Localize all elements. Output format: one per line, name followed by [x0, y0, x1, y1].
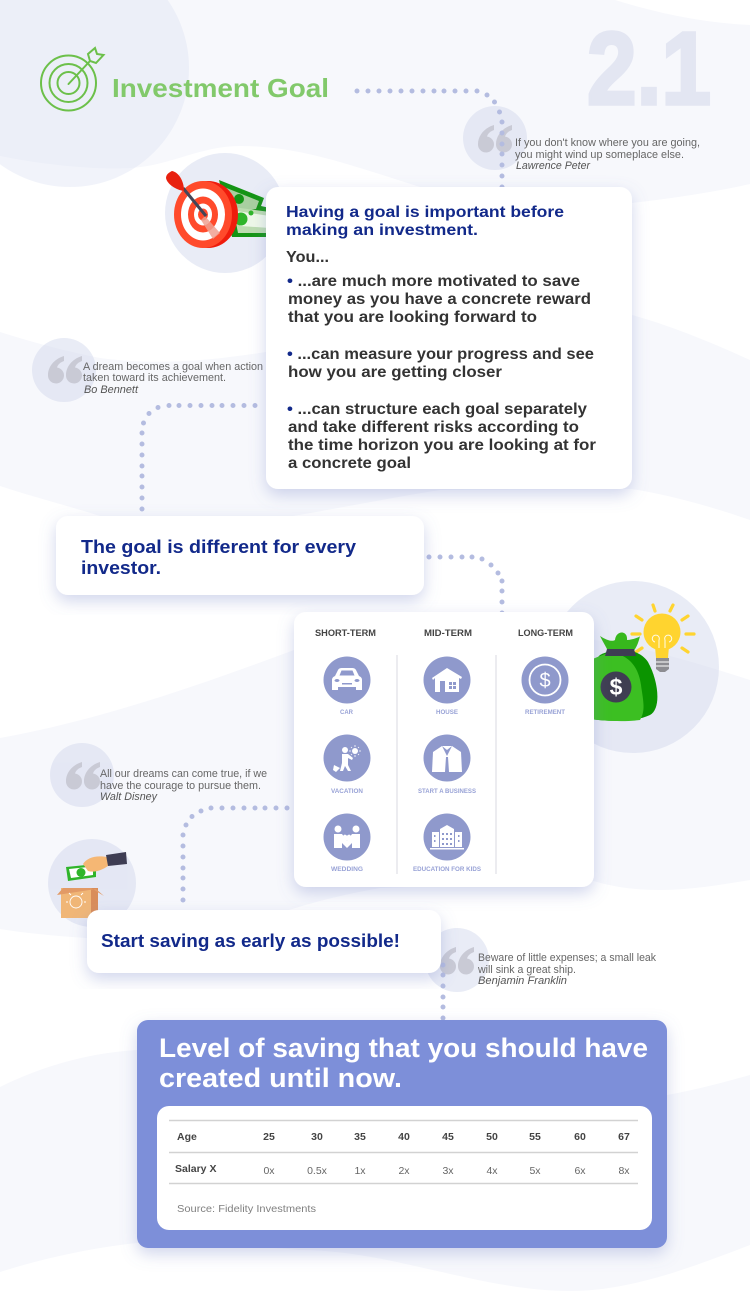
- icon: money bag and light bulb: [590, 605, 694, 721]
- quote: Walt Disney: [100, 768, 267, 803]
- table: saving by age: Salary X: [175, 1163, 216, 1175]
- icon: wedding couple: [324, 814, 370, 860]
- table: saving by age: 0x: [263, 1165, 275, 1177]
- table: saving by age: 45: [442, 1131, 454, 1143]
- panel: why a goal matters: • ...can structure each goal separately: [287, 401, 587, 418]
- quote: Lawrence Peter: [515, 137, 700, 172]
- table: saving by age: 30: [311, 1131, 323, 1143]
- quote: Bo Bennett: A dream becomes a goal when action: [83, 361, 263, 373]
- icon: vacation traveller: [324, 734, 370, 782]
- heading: level of saving: created until now.: [159, 1063, 402, 1093]
- panel: level of saving: [137, 1020, 667, 1248]
- icon: school building: [424, 814, 470, 860]
- table: saving by age: 2x: [398, 1165, 410, 1177]
- panel: goal differs per investor: The goal is different for every: [81, 536, 357, 557]
- quote: Bo Bennett: taken toward its achievement.: [83, 372, 226, 384]
- label: retirement: RETIREMENT: [525, 710, 565, 716]
- icon: dartboard and money: [166, 171, 270, 248]
- icon: green target with arrow: [41, 48, 104, 110]
- icon: hand putting money in box: [57, 852, 127, 918]
- table: saving by age: 60: [574, 1131, 586, 1143]
- quote: Bo Bennett: [83, 361, 263, 396]
- panel: why a goal matters: that you are looking forward to: [288, 309, 537, 326]
- quote: Benjamin Franklin: will sink a great ship.: [477, 964, 576, 976]
- panel: why a goal matters: and take different risks according to: [288, 419, 579, 436]
- table: saving by age: 6x: [574, 1165, 586, 1177]
- label: start a business: START A BUSINESS: [418, 789, 476, 795]
- table: saving by age: 35: [354, 1131, 366, 1143]
- panel: why a goal matters: a concrete goal: [288, 455, 411, 472]
- quote: Bo Bennett: Bo Bennett: [84, 384, 139, 396]
- section number: 2.1: [587, 11, 711, 126]
- icon: money bag and light bulb: $: [610, 674, 623, 700]
- panel: why a goal matters: the time horizon you are looking at for: [288, 437, 596, 454]
- label: education for kids: EDUCATION FOR KIDS: [413, 867, 481, 873]
- quote: Benjamin Franklin: Benjamin Franklin: [478, 975, 567, 987]
- panel: why a goal matters: Having a goal is important before: [286, 204, 564, 221]
- table: saving by age: Age: [177, 1131, 197, 1143]
- icon backdrop circles: [32, 106, 719, 992]
- table: saving by age: 1x: [354, 1165, 366, 1177]
- table: saving by age: 3x: [442, 1165, 454, 1177]
- quote: Walt Disney: All our dreams can come true, if we: [100, 768, 267, 780]
- label: car: CAR: [340, 710, 354, 716]
- panel: why a goal matters: [266, 187, 632, 489]
- table: saving by age: [157, 1106, 652, 1230]
- panel: why a goal matters: money as you have a concrete reward: [288, 291, 591, 308]
- quote: Lawrence Peter: you might wind up someplace else.: [515, 149, 684, 161]
- table: saving by age: Source: Fidelity Investments: [177, 1203, 316, 1215]
- quote: Lawrence Peter: Lawrence Peter: [516, 160, 591, 172]
- title: Investment Goal: [112, 73, 329, 103]
- icon: quotation marks: [48, 125, 512, 974]
- quote: Benjamin Franklin: [477, 952, 656, 987]
- icon: dollar coin: [522, 656, 568, 704]
- quote: Walt Disney: have the courage to pursue them.: [100, 780, 261, 792]
- heading: level of saving: Level of saving that you should have: [159, 1033, 648, 1063]
- label: house: HOUSE: [436, 710, 458, 716]
- table: saving by age: 0.5x: [307, 1165, 328, 1177]
- panel: goal time horizons: MID-TERM: [424, 628, 472, 639]
- panel: goal differs per investor: [56, 516, 424, 595]
- table: saving by age: 4x: [486, 1165, 498, 1177]
- panel: start saving early: Start saving as early as possible!: [101, 930, 400, 951]
- panel: goal differs per investor: investor.: [81, 557, 161, 578]
- table: saving by age: 40: [398, 1131, 410, 1143]
- icon: dollar coin: $: [539, 670, 551, 692]
- table: saving by age: 8x: [618, 1165, 630, 1177]
- panel: why a goal matters: making an investment.: [286, 222, 478, 239]
- panel: goal time horizons: LONG-TERM: [518, 628, 573, 639]
- icon: house: [424, 656, 470, 704]
- panel: goal time horizons: SHORT-TERM: [315, 628, 376, 639]
- label: vacation: VACATION: [331, 789, 363, 795]
- table: saving by age: 55: [529, 1131, 541, 1143]
- panel: why a goal matters: You...: [286, 249, 329, 266]
- panel: goal time horizons: [294, 612, 594, 887]
- table: saving by age: 25: [263, 1131, 275, 1143]
- decorative large circle top left: [0, 0, 189, 187]
- quote: Benjamin Franklin: Beware of little expenses; a small leak: [478, 952, 656, 964]
- label: wedding: WEDDING: [331, 867, 363, 873]
- dotted connector lines: [142, 91, 502, 1018]
- panel: why a goal matters: • ...can measure your progress and see: [287, 346, 594, 363]
- panel: why a goal matters: how you are getting closer: [288, 364, 502, 381]
- quote: Lawrence Peter: If you don't know where you are going,: [515, 137, 700, 149]
- panel: start saving early: [87, 910, 441, 973]
- icon: car: [324, 656, 370, 704]
- table: saving by age: 50: [486, 1131, 498, 1143]
- table: saving by age: 67: [618, 1131, 630, 1143]
- icon: business suit: [424, 734, 470, 782]
- quote: Walt Disney: Walt Disney: [100, 791, 158, 803]
- heading: level of saving: [159, 1033, 648, 1093]
- panel: why a goal matters: • ...are much more motivated to save: [287, 273, 580, 290]
- table: saving by age: 5x: [529, 1165, 541, 1177]
